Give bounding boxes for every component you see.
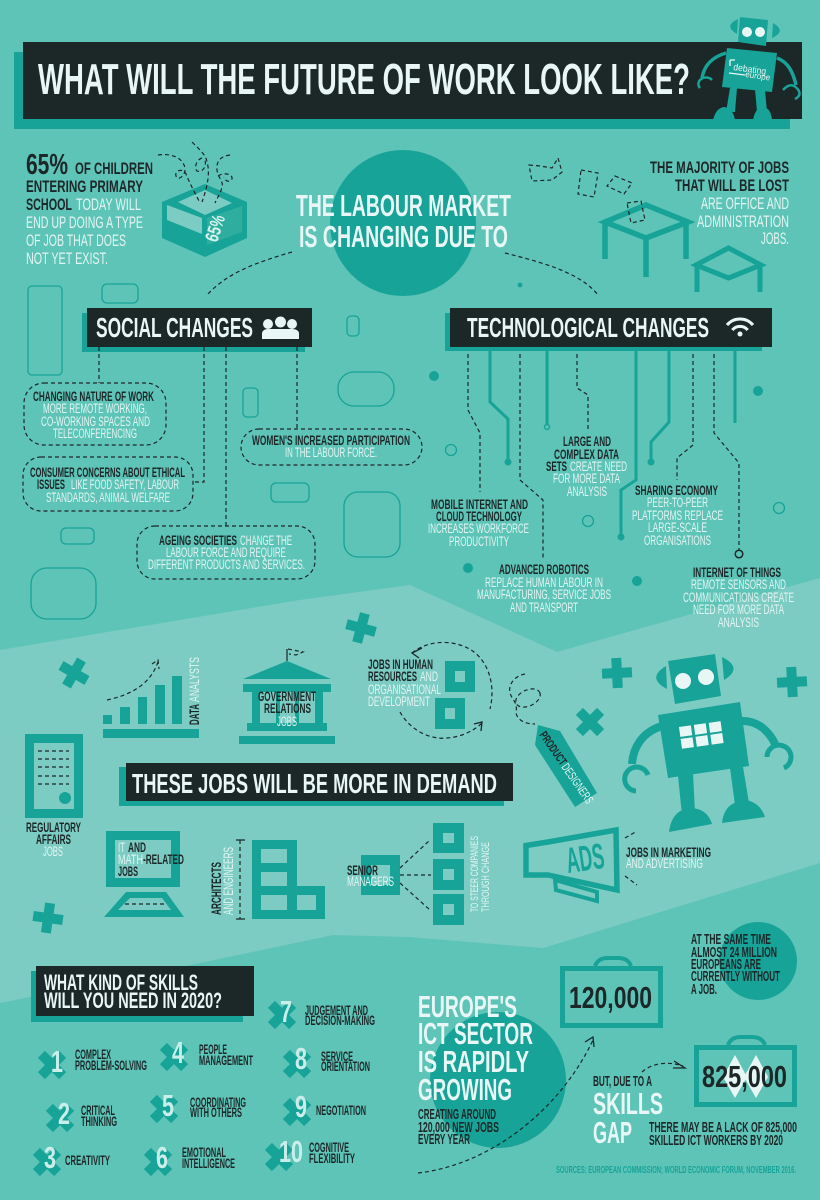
skill 2 — [39, 1096, 117, 1139]
skill 5: COORDINATING — [190, 1095, 246, 1110]
label: senior managers — [347, 863, 394, 889]
panel: consumer concerns: STANDARDS, ANIMAL WELFARE — [46, 490, 170, 505]
panel: ageing societies: DIFFERENT PRODUCTS AND SERVICES. — [148, 557, 305, 572]
heading: social changes: SOCIAL CHANGES — [96, 312, 253, 343]
panel: consumer concerns: CONSUMER CONCERNS ABOUT ETHICAL — [30, 465, 185, 480]
panel: ageing societies: AGEING SOCIETIES — [159, 533, 237, 548]
label: IT and math jobs: MATH — [118, 852, 143, 867]
text: large and complex data sets: COMPLEX DATA — [554, 447, 619, 462]
text: 24 million unemployed: EUROPEANS ARE — [691, 957, 761, 973]
label: data analysts — [187, 657, 202, 725]
panel: ageing societies: CHANGE THE — [240, 533, 292, 548]
heading: Europe's ICT sector: ICT SECTOR — [418, 1017, 533, 1051]
text: large and complex data sets: SETS — [546, 459, 567, 474]
text: advanced robotics: MANUFACTURING, SERVICE JOBS — [477, 587, 611, 602]
icon: 65 percent box — [158, 142, 247, 257]
decorative centre circle — [330, 150, 476, 296]
text: large and complex data sets: CREATE NEED — [570, 459, 627, 474]
label: IT and math jobs: -RELATED — [143, 852, 184, 867]
text: creating around 120,000 jobs: 120,000 NEW JOBS — [418, 1120, 499, 1136]
text: 24 million unemployed: A JOB. — [691, 982, 717, 998]
title banner — [14, 42, 802, 129]
label: IT and math jobs: JOBS — [118, 864, 138, 879]
social connector lines — [99, 347, 297, 526]
text: sharing economy: PEER-TO-PEER — [647, 495, 708, 510]
label: jobs in HR: JOBS IN HUMAN — [368, 657, 433, 672]
label: regulatory affairs jobs — [26, 820, 81, 859]
panel: consumer concerns: ISSUES — [37, 477, 65, 492]
label: architects and engineers: AND ENGINEERS — [221, 847, 236, 915]
arrow: dashed arc to social changes — [207, 252, 292, 295]
text: 65 percent of children: OF CHILDREN — [75, 160, 153, 178]
label: architects and engineers — [209, 847, 236, 915]
text: large and complex data sets — [546, 434, 627, 499]
text: sharing economy: LARGE-SCALE — [648, 520, 707, 535]
chart: data analysts bars — [103, 657, 202, 738]
label: regulatory affairs jobs: AFFAIRS — [36, 832, 71, 847]
text: mobile internet — [428, 497, 529, 549]
decorative circle behind ICT text — [430, 1012, 566, 1148]
label: jobs in HR: ORGANISATIONAL — [368, 682, 441, 697]
skill 8: ORIENTATION — [321, 1059, 370, 1074]
label: data analysts: ANALYSTS — [187, 657, 202, 702]
icon: regulatory document — [26, 738, 81, 859]
text: large and complex data sets: FOR MORE DATA — [553, 471, 620, 486]
label: IT and math jobs: AND — [128, 840, 146, 855]
text: 65 percent of children: NOT YET EXIST. — [26, 250, 108, 268]
panel: consumer concerns: LIKE FOOD SAFETY, LABOUR — [71, 477, 179, 492]
text: mobile internet: PRODUCTIVITY — [449, 534, 509, 549]
icon: senior managers org chart — [347, 828, 492, 920]
text: 24 million unemployed — [691, 932, 780, 998]
text: creating around 120,000 jobs: CREATING AROUND — [418, 1107, 496, 1123]
decorative outlined rounded rectangles — [28, 284, 400, 619]
label: senior managers: SENIOR — [347, 863, 378, 878]
decorative circle behind unemployment text — [719, 922, 797, 1000]
arrow: dashed arc to technological changes — [505, 253, 598, 295]
heading: Europe's ICT sector — [418, 990, 533, 1107]
text: 65 percent of children: END UP DOING A TYPE — [26, 214, 143, 232]
panel: women's participation: IN THE LABOUR FORCE. — [285, 445, 377, 460]
text: mobile internet: CLOUD TECHNOLOGY — [436, 509, 522, 524]
label: jobs in marketing: AND ADVERTISING — [626, 856, 703, 871]
icon: large robot — [625, 654, 791, 832]
text: sharing economy: PLATFORMS REPLACE — [632, 508, 723, 523]
label: IT and math jobs — [118, 840, 184, 879]
skill 5: 5 — [162, 1088, 174, 1123]
heading: what kind of skills: WILL YOU NEED IN 2020? — [44, 988, 222, 1013]
skill 8 — [276, 1041, 370, 1085]
panel: women's participation — [241, 429, 422, 465]
tech circuit lines — [429, 282, 784, 586]
skill 6: 6 — [156, 1140, 168, 1175]
text: advanced robotics: AND TRANSPORT — [510, 600, 578, 615]
text: sharing economy: SHARING ECONOMY — [635, 483, 718, 498]
text: large and complex data sets: LARGE AND — [563, 434, 611, 449]
heading: these jobs will be more in demand: THESE JOBS WILL BE MORE IN DEMAND — [132, 768, 497, 799]
text: 65 percent of children: 65% — [26, 149, 68, 181]
heading: the labour market is changing due to: THE LABOUR MARKET — [296, 189, 511, 223]
text: mobile internet: MOBILE INTERNET AND — [431, 497, 528, 512]
panel: women's participation: WOMEN'S INCREASED PARTICIPATION — [252, 433, 410, 448]
heading: social changes — [82, 308, 312, 352]
skill 1 — [31, 1044, 147, 1086]
icon: ads megaphone — [526, 830, 711, 901]
skill 9: 9 — [295, 1089, 307, 1124]
icon: wifi — [727, 319, 753, 336]
label: government relations: GOVERNMENT — [258, 689, 316, 704]
text: creating around 120,000 jobs: EVERY YEAR — [418, 1132, 470, 1148]
skill 4: 4 — [172, 1035, 185, 1070]
label: jobs in HR — [368, 657, 441, 709]
icon: briefcase 825,000: 825,000 — [702, 1060, 787, 1094]
skill 4 — [153, 1035, 253, 1078]
text: large and complex data sets: ANALYSIS — [567, 484, 607, 499]
heading: these jobs will be more in demand — [119, 763, 513, 806]
label: to steer companies: TO STEER COMPANIES — [469, 836, 481, 912]
icon: briefcase 120,000: 120,000 — [569, 981, 652, 1015]
text: sharing economy — [632, 483, 723, 548]
label: senior managers: MANAGERS — [347, 874, 394, 889]
skill 10 — [258, 1134, 355, 1178]
icon: 65 percent box: 65% — [202, 212, 230, 245]
text: internet of things: ANALYSIS — [718, 615, 759, 630]
skill 6 — [137, 1140, 235, 1183]
skill 6: INTELLIGENCE — [182, 1156, 235, 1171]
panel: changing nature of work: TELECONFERENCING — [53, 426, 137, 441]
label: government relations — [258, 689, 316, 729]
skill 2: CRITICAL — [81, 1103, 115, 1118]
skill 7: JUDGEMENT AND — [305, 1003, 368, 1018]
label: to steer companies — [469, 836, 492, 912]
label: architects and engineers: ARCHITECTS — [209, 862, 224, 915]
skill 6: EMOTIONAL — [182, 1145, 226, 1160]
panel: changing nature of work: MORE REMOTE WORKING, — [43, 401, 147, 416]
skill 1: COMPLEX — [75, 1047, 111, 1062]
skill 10: 10 — [279, 1134, 303, 1169]
heading: Europe's ICT sector: EUROPE'S — [418, 990, 517, 1024]
icon: people — [262, 316, 299, 339]
heading: technological changes — [445, 308, 772, 351]
panel: changing nature of work — [24, 383, 166, 445]
arrow: growth to briefcase — [418, 1037, 594, 1173]
icon: debating europe robot logo: debating — [733, 62, 767, 78]
skill 4: MANAGEMENT — [199, 1053, 253, 1068]
label: jobs in HR: AND — [420, 669, 438, 684]
heading: the labour market is changing due to: IS CHANGING DUE TO — [299, 220, 508, 254]
panel: changing nature of work: CO-WORKING SPACES AND — [41, 414, 150, 429]
icon: ads megaphone: ADS — [563, 835, 607, 881]
text: skills gap: GAP — [593, 1116, 632, 1150]
skill 2: THINKING — [81, 1114, 117, 1129]
label: IT and math jobs: IT — [118, 840, 125, 855]
skill 1: 1 — [51, 1044, 63, 1079]
skill 5: WITH OTHERS — [190, 1105, 242, 1120]
text: internet of things — [683, 565, 794, 630]
skill 4: PEOPLE — [199, 1042, 227, 1057]
text: advanced robotics — [477, 562, 611, 615]
label: data analysts: DATA — [187, 704, 202, 725]
skill 1: PROBLEM-SOLVING — [75, 1058, 147, 1073]
icon: debating europe robot logo — [698, 17, 800, 120]
label: regulatory affairs jobs: JOBS — [43, 844, 63, 859]
icon: computer IT jobs — [104, 836, 184, 917]
icon: product designers tag: DESIGNERS — [559, 761, 596, 806]
text: skills gap — [593, 1074, 797, 1150]
icon: briefcase 120,000 — [562, 958, 660, 1026]
label: to steer companies: THROUGH CHANGE — [480, 842, 492, 912]
panel: changing nature of work: CHANGING NATURE OF WORK — [33, 389, 154, 404]
skill 9: NEGOTIATION — [316, 1103, 366, 1118]
icon: product designers tag: PRODUCT — [537, 729, 570, 768]
text: 65 percent of children — [26, 149, 153, 268]
icon: debating europe robot logo: europe — [745, 69, 771, 82]
panel: consumer concerns — [23, 457, 193, 511]
panel: ageing societies: LABOUR FORCE AND REQUIRE — [166, 545, 286, 560]
skill 10: COGNITIVE — [309, 1140, 349, 1155]
text: mobile internet: INCREASES WORKFORCE — [428, 521, 529, 536]
heading: what kind of skills — [31, 966, 254, 1022]
skill 7 — [261, 994, 375, 1036]
skill 5 — [143, 1088, 246, 1130]
label: jobs in HR: DEVELOPMENT — [368, 694, 430, 709]
skill 3 — [26, 1140, 110, 1183]
text: majority of jobs lost — [650, 159, 789, 248]
icon: office desks and papers — [529, 158, 761, 292]
icon: government building — [239, 649, 335, 744]
label: government relations: RELATIONS — [264, 701, 311, 716]
text: skills gap: SKILLS — [593, 1087, 663, 1121]
icon: architects building — [209, 840, 325, 919]
skill 3: 3 — [44, 1140, 56, 1175]
arrow: to 825,000 — [642, 1061, 685, 1072]
skill 10: FLEXIBILITY — [309, 1151, 355, 1166]
skill 8: 8 — [295, 1041, 307, 1076]
text: skills gap: BUT, DUE TO A — [593, 1074, 652, 1090]
text: 65 percent of children: ENTERING PRIMARY — [26, 178, 143, 196]
icon: briefcase 825,000 — [696, 1037, 794, 1104]
skill 2: 2 — [58, 1096, 70, 1131]
heading: what kind of skills: WHAT KIND OF SKILLS — [44, 970, 198, 995]
text: 65 percent of children: OF JOB THAT DOES — [26, 232, 126, 250]
skill 9 — [276, 1089, 366, 1133]
text: creating around 120,000 jobs — [418, 1107, 499, 1148]
heading: the labour market is changing due to — [296, 189, 511, 254]
panel: ageing societies — [137, 526, 315, 579]
text: 65 percent of children: SCHOOL — [26, 196, 72, 214]
text: advanced robotics: ADVANCED ROBOTICS — [499, 562, 589, 577]
skill 3: CREATIVITY — [65, 1153, 110, 1168]
heading: Europe's ICT sector: IS RAPIDLY — [418, 1045, 529, 1079]
text: majority of jobs lost: JOBS. — [761, 230, 789, 248]
text: advanced robotics: REPLACE HUMAN LABOUR IN — [485, 575, 603, 590]
skill 7: DECISION-MAKING — [305, 1013, 375, 1028]
icon: product designers tag — [510, 674, 597, 807]
skill 8: SERVICE — [321, 1049, 353, 1064]
text: 65 percent of children: TODAY WILL — [76, 196, 141, 214]
icon: human resources squares with arrows — [368, 642, 492, 738]
label: jobs in HR: RESOURCES — [368, 669, 417, 684]
label: jobs in marketing — [626, 845, 711, 871]
arrow: growth — [107, 660, 159, 700]
label: jobs in marketing: JOBS IN MARKETING — [626, 845, 711, 860]
text: sharing economy: ORGANISATIONS — [644, 533, 711, 548]
decorative plus signs — [31, 610, 808, 935]
skill 7: 7 — [280, 994, 292, 1029]
label: government relations: JOBS — [277, 714, 297, 729]
heading: Europe's ICT sector: GROWING — [418, 1073, 512, 1107]
label: regulatory affairs jobs: REGULATORY — [26, 820, 81, 835]
robot chest buttons — [679, 721, 724, 749]
